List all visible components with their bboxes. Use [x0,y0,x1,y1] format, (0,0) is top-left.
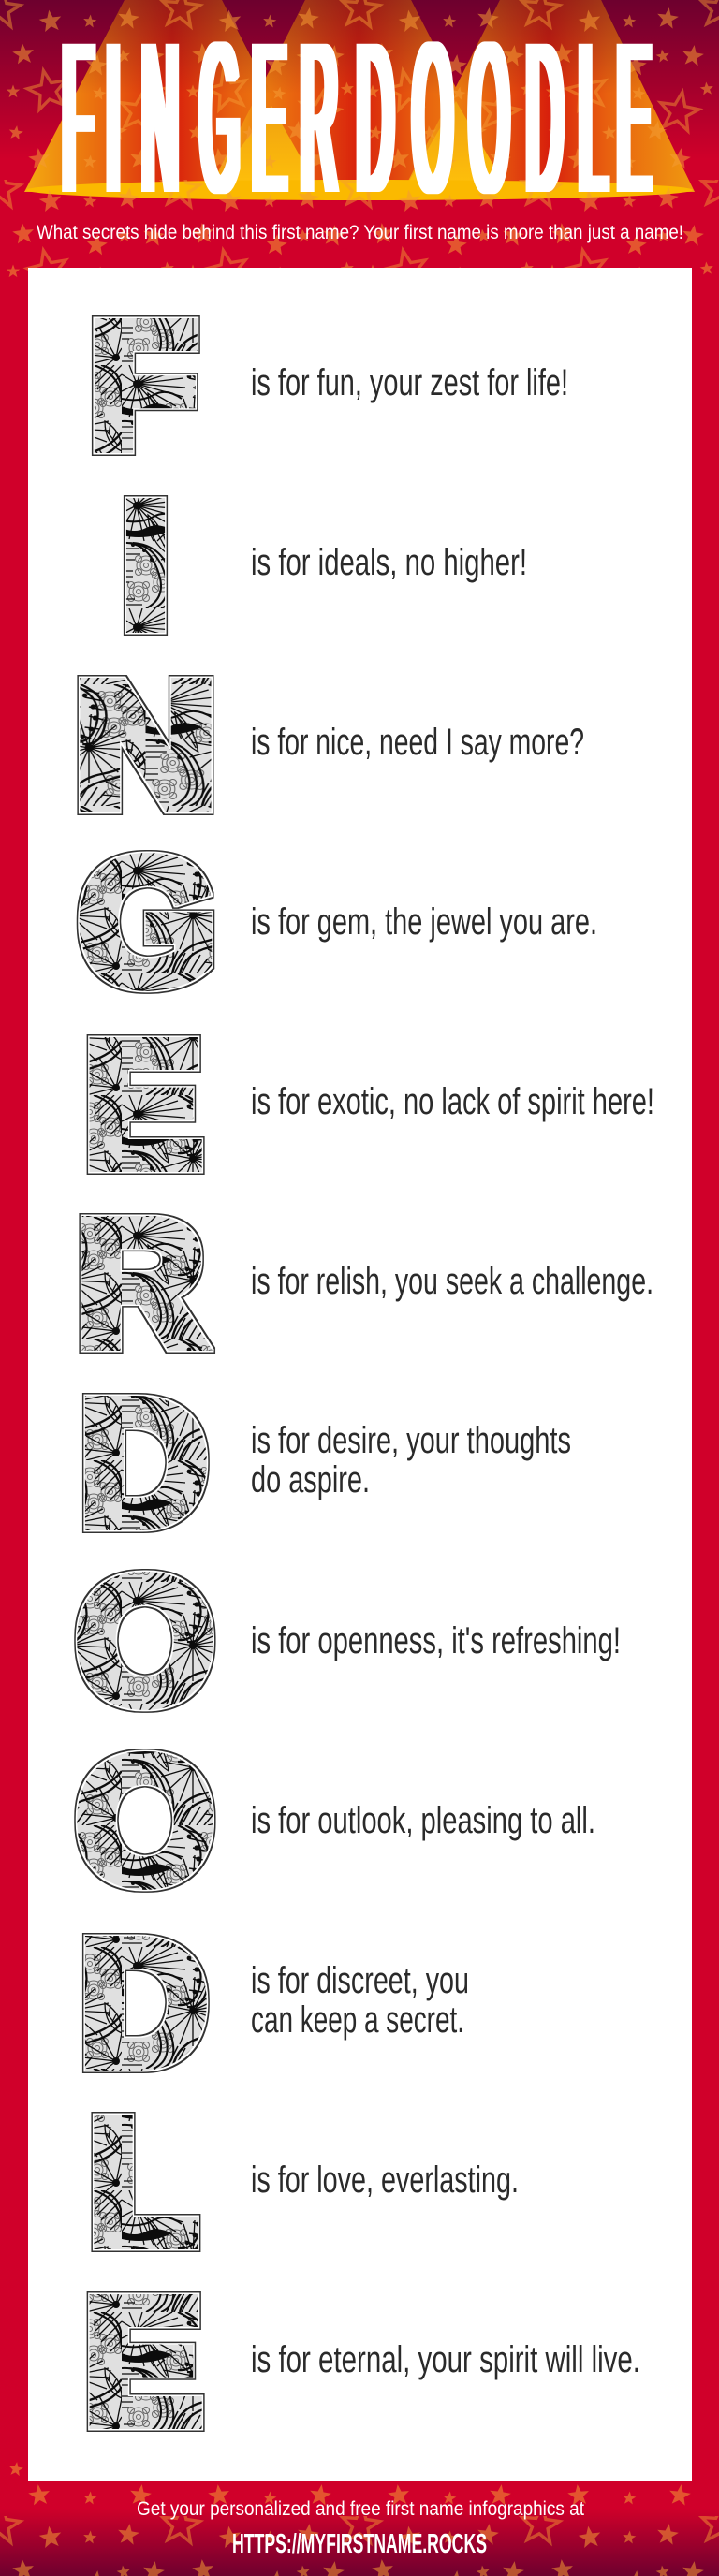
text: G line: is for gem, the jewel you are. [251,901,597,943]
letter R: R [77,1185,204,1383]
text: D line: is for desire, your thoughts [251,1420,571,1461]
letter G: G [79,824,216,1021]
text: D second line: can keep a secret. [251,1999,464,2041]
text: O second line: is for outlook, pleasing to all. [251,1800,595,1841]
text: D line [251,1420,571,1500]
letter L: L [89,2084,197,2281]
letter E: E [84,1006,202,1204]
text: F line: is for fun, your zest for life! [251,362,568,403]
text: D second line [251,1960,469,2041]
text: D second line: is for discreet, you [251,1960,469,2001]
title: FINGERDOODLE [63,0,651,239]
text: L line: is for love, everlasting. [251,2159,519,2201]
letter D second: D [80,1905,208,2102]
footer url: HTTPS://MYFIRSTNAME.ROCKS [232,2529,487,2559]
letter O: O [76,1543,214,1740]
footer line: Get your personalized and free first name infographics at [137,2498,584,2520]
letter N: N [74,646,217,844]
spotlights [24,0,695,200]
letter O second: O [76,1722,214,1920]
letter I: I [121,467,170,665]
text: I line: is for ideals, no higher! [251,542,527,583]
panel: letters list [28,268,692,2481]
text: N line: is for nice, need I say more? [251,722,584,763]
letter F: F [89,287,198,485]
letter D: D [80,1365,208,1562]
text: D line: do aspire. [251,1459,370,1500]
letter E second: E [84,2263,202,2461]
